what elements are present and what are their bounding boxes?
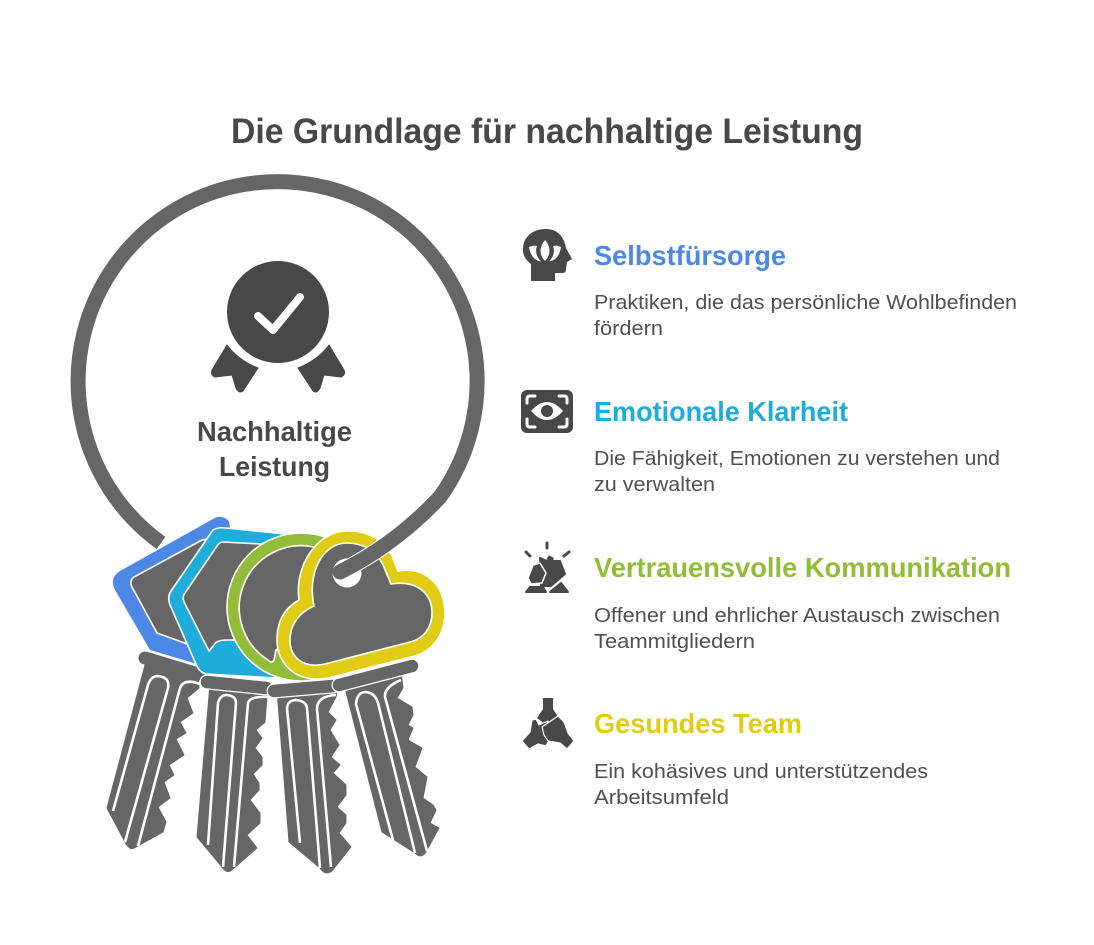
- tag hole: [332, 558, 362, 588]
- heading: Vertrauensvolle Kommunikation: Vertrauensvolle Kommunikation: [594, 552, 1011, 583]
- text: Vertrauensvolle Kommunikation description: [594, 605, 1000, 653]
- green tag: [227, 533, 375, 681]
- key 4: [339, 666, 439, 856]
- yellow cloud tag: [277, 531, 445, 679]
- cyan tag: [169, 528, 285, 678]
- text: Emotionale Klarheit description: [594, 448, 1000, 496]
- ring main arc: [78, 182, 477, 543]
- text: Gesundes Team description: Arbeitsumfeld: [594, 787, 729, 809]
- text: Emotionale Klarheit description: zu verwalten: [594, 474, 715, 496]
- heading: Emotionale Klarheit: Emotionale Klarheit: [594, 396, 848, 427]
- text: Emotionale Klarheit description: Die Fähigkeit, Emotionen zu verstehen und: [594, 448, 1000, 470]
- icon: eye in frame: [521, 390, 573, 433]
- blue pentagon tag: [113, 517, 240, 664]
- icon: head with lotus: [523, 229, 572, 281]
- heading: Selbstfürsorge: Selbstfürsorge: [594, 240, 786, 271]
- key 2: [197, 682, 268, 872]
- icon: stacked hands: [522, 698, 574, 749]
- text: Selbstfürsorge description: Praktiken, die das persönliche Wohlbefinden: [594, 292, 1017, 314]
- ring label: Leistung: [219, 451, 330, 482]
- key 1: [107, 658, 200, 849]
- text: Gesundes Team description: Ein kohäsives und unterstützendes: [594, 761, 928, 783]
- text: Selbstfürsorge description: [594, 292, 1017, 340]
- ring end through hole: [340, 497, 440, 572]
- text: Gesundes Team description: [594, 761, 928, 809]
- text: Selbstfürsorge description: fördern: [594, 318, 663, 340]
- ring label: [197, 416, 352, 482]
- key 3: [274, 685, 351, 873]
- ring label: Nachhaltige: [197, 416, 352, 447]
- title: Die Grundlage für nachhaltige Leistung: [231, 112, 863, 151]
- icon: medal with check: [211, 261, 345, 392]
- heading: Gesundes Team: Gesundes Team: [594, 708, 802, 739]
- icon: rocks with rays: [526, 543, 569, 592]
- text: Vertrauensvolle Kommunikation description: Teammitgliedern: [594, 631, 755, 653]
- keyring illustration: [78, 182, 477, 873]
- text: Vertrauensvolle Kommunikation description: Offener und ehrlicher Austausch zwischen: [594, 605, 1000, 627]
